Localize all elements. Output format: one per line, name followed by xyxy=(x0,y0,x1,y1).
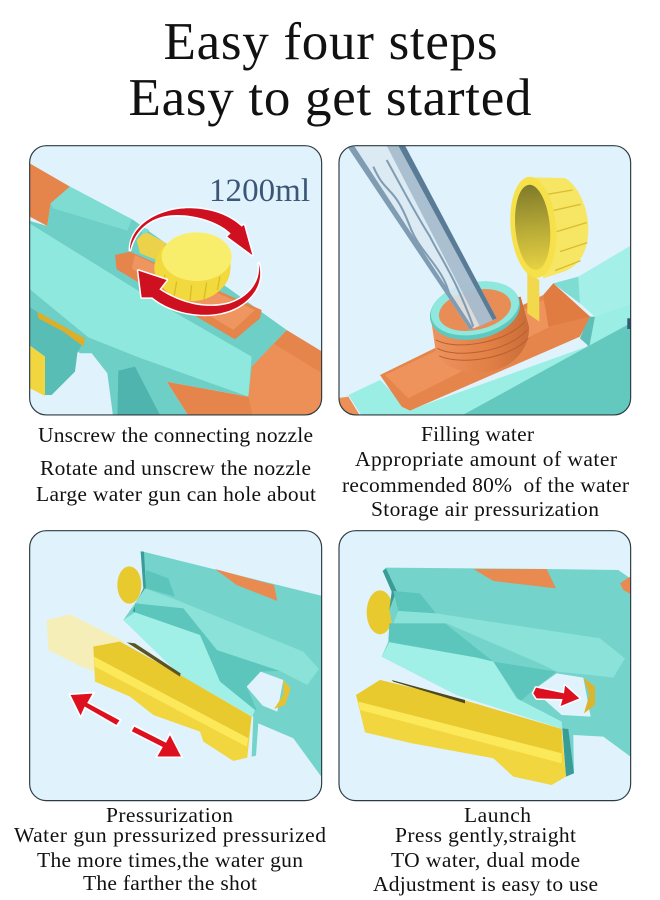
title xyxy=(128,13,532,127)
red double arrows xyxy=(69,693,182,757)
title: Easy four steps xyxy=(164,13,498,71)
trigger xyxy=(583,678,595,713)
red trigger arrow xyxy=(533,686,579,706)
yellow screw cap xyxy=(154,247,231,301)
trigger opening xyxy=(533,673,591,717)
yellow knob xyxy=(117,566,141,604)
gun barrel orange rear xyxy=(30,164,70,226)
teal gun body xyxy=(382,568,635,777)
caption: step 1: Large water gun can hole about xyxy=(36,482,316,506)
teal gun surface xyxy=(337,244,633,418)
caption: step 2: Storage air pressurization xyxy=(371,497,599,521)
caption: step 4: Press gently,straight xyxy=(395,823,576,847)
capacity label: 1200ml xyxy=(209,173,310,209)
caption: step 2 xyxy=(342,422,629,521)
grip dark side xyxy=(118,366,160,414)
caption: step 4: Launch xyxy=(464,803,531,827)
panel: step 3 pressurization xyxy=(30,531,325,801)
yellow sliding handle xyxy=(93,642,252,761)
orange plate xyxy=(115,252,262,339)
caption: step 1: Unscrew the connecting nozzle xyxy=(38,423,313,447)
panel: step 1 unscrew nozzle xyxy=(27,146,325,418)
caption: step 2: Filling water xyxy=(421,422,534,446)
trigger guard xyxy=(30,308,82,395)
caption: step 4 xyxy=(373,803,598,896)
orange plate xyxy=(380,283,590,411)
water stream xyxy=(347,146,497,330)
grip opening xyxy=(92,353,113,414)
caption: step 3: Water gun pressurized pressurized xyxy=(14,823,326,847)
caption: step 2: Appropriate amount of water xyxy=(355,447,617,471)
teal filling ring xyxy=(430,281,520,340)
rotation arrows xyxy=(130,208,260,315)
caption: step 3 xyxy=(14,803,326,895)
trigger opening xyxy=(247,672,283,712)
trigger detail xyxy=(37,312,85,347)
yellow knob xyxy=(367,590,393,634)
caption: step 3: The farther the shot xyxy=(83,871,257,895)
threaded neck xyxy=(431,297,529,373)
caption: step 3: Pressurization xyxy=(106,803,233,827)
yellow hinged cap xyxy=(506,175,588,280)
yellow magazine piece xyxy=(30,346,45,396)
caption: step 4: TO water, dual mode xyxy=(391,848,580,872)
title: Easy to get started xyxy=(128,69,532,127)
gun body teal xyxy=(27,187,287,418)
panel: step 2 filling water xyxy=(337,146,633,418)
caption: step 4: Adjustment is easy to use xyxy=(373,872,598,896)
yellow cap tether xyxy=(527,272,539,322)
caption: step 3: The more times,the water gun xyxy=(37,848,303,872)
panel: step 4 launch xyxy=(339,531,635,801)
yellow handle xyxy=(356,680,566,785)
trigger xyxy=(274,680,291,709)
caption: step 1 xyxy=(36,423,316,506)
nozzle neck xyxy=(137,232,167,260)
faded handle motion ghost xyxy=(47,614,124,672)
edge mark xyxy=(627,318,631,329)
caption: step 1: Rotate and unscrew the nozzle xyxy=(40,456,311,480)
teal gun body xyxy=(123,551,325,782)
caption: step 2: recommended 80% of the water xyxy=(342,473,629,497)
